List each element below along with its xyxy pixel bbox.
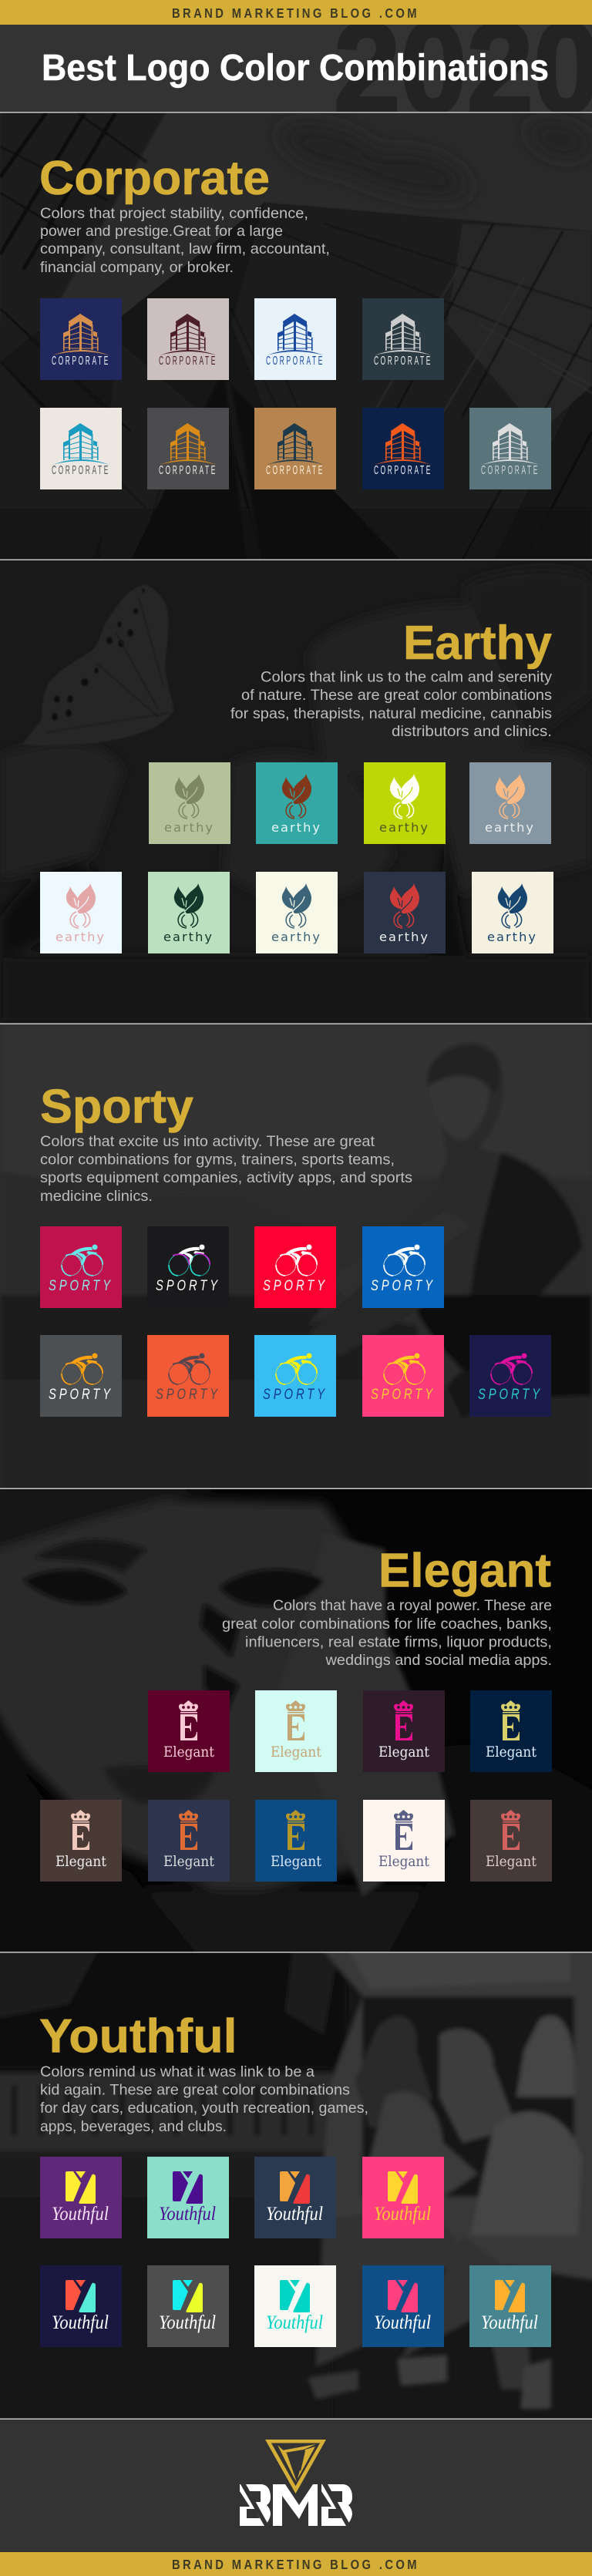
heading: Earthy bbox=[403, 617, 553, 670]
logo: elegant blush bbox=[363, 1800, 445, 1882]
logo: elegant mint bbox=[255, 1690, 337, 1772]
logo: earthy ivory: earthy bbox=[271, 930, 321, 944]
logo: earthy sage: earthy bbox=[164, 820, 214, 835]
logo: corporate slate: CORPORATE bbox=[374, 355, 432, 368]
logo: corporate tan: CORPORATE bbox=[266, 464, 325, 477]
panel: sporty bbox=[0, 1017, 592, 1495]
logo: sporty indigo: SPORTY bbox=[478, 1387, 543, 1403]
description bbox=[222, 1597, 552, 1669]
logo: youthful grey: Youthful bbox=[159, 2312, 216, 2333]
logo: elegant plum bbox=[363, 1690, 445, 1772]
description bbox=[230, 669, 552, 740]
description: influencers, real estate firms, liquor products, bbox=[245, 1634, 552, 1651]
logo: sporty orange: SPORTY bbox=[156, 1387, 220, 1403]
letter M bbox=[273, 2484, 318, 2526]
description: for spas, therapists, natural medicine, cannabis bbox=[230, 705, 552, 722]
logo: elegant plum: Elegant bbox=[378, 1744, 429, 1760]
background photo: butterfly and flowers bbox=[0, 585, 590, 959]
logo: elegant navy bbox=[470, 1690, 552, 1772]
logo: elegant royal blue bbox=[255, 1800, 337, 1882]
logo: youthful aqua bbox=[147, 2157, 229, 2238]
logo: earthy parchment: earthy bbox=[487, 930, 537, 944]
logo: sporty blue bbox=[362, 1226, 444, 1308]
logo: sporty black: SPORTY bbox=[156, 1278, 220, 1294]
logo: sporty indigo bbox=[469, 1335, 551, 1417]
description: color combinations for gyms, trainers, sports teams, bbox=[40, 1152, 395, 1169]
panel: elegant bbox=[0, 1484, 592, 1966]
logo: sporty black bbox=[147, 1226, 229, 1308]
logo: earthy pale blue: earthy bbox=[56, 930, 106, 944]
logo: sporty grey: SPORTY bbox=[49, 1387, 113, 1403]
logo: earthy mint bbox=[148, 872, 230, 953]
logo: earthy blue-grey bbox=[469, 762, 551, 844]
logo: sporty red bbox=[254, 1226, 336, 1308]
logo: elegant burgundy bbox=[148, 1690, 230, 1772]
logo: youthful pink: Youthful bbox=[374, 2204, 431, 2225]
letter B right bbox=[320, 2484, 352, 2526]
logo: sporty crimson bbox=[40, 1226, 122, 1308]
description: power and prestige.Great for a large bbox=[40, 223, 283, 240]
description: distributors and clinics. bbox=[392, 723, 552, 740]
logo: earthy ink: earthy bbox=[379, 930, 429, 944]
logo: elegant taupe: Elegant bbox=[486, 1853, 536, 1870]
description: medicine clinics. bbox=[40, 1188, 153, 1205]
logo: youthful indigo: Youthful bbox=[52, 2312, 109, 2333]
description: Colors that excite us into activity. These are great bbox=[40, 1133, 375, 1150]
logo: corporate steel: CORPORATE bbox=[481, 464, 540, 477]
logo: corporate ice bbox=[254, 298, 336, 380]
logo: corporate navy bbox=[40, 298, 122, 380]
logo: sporty sky: SPORTY bbox=[263, 1387, 328, 1403]
van and people bbox=[308, 1946, 592, 2409]
logo: earthy ivory bbox=[256, 872, 338, 953]
logo: youthful aqua: Youthful bbox=[159, 2204, 216, 2225]
logo: elegant mint: Elegant bbox=[271, 1744, 321, 1760]
icon: butterfly bbox=[22, 584, 173, 745]
background photo: woman on beach bbox=[0, 1017, 592, 1495]
logo: earthy teal: earthy bbox=[271, 820, 321, 835]
logo: elegant navy: Elegant bbox=[486, 1744, 536, 1760]
description: company, consultant, law firm, accountant, bbox=[40, 240, 330, 257]
description: great color combinations for life coaches, banks, bbox=[222, 1616, 552, 1633]
description: kid again. These are great color combinations bbox=[40, 2081, 350, 2098]
logo: earthy lime bbox=[364, 762, 446, 844]
logo: elegant brown: Elegant bbox=[56, 1853, 106, 1870]
heading: Corporate bbox=[39, 152, 270, 205]
letter B left bbox=[238, 2484, 271, 2526]
logo: youthful white bbox=[254, 2265, 336, 2347]
logo: corporate midnight bbox=[362, 408, 444, 489]
description: Colors that project stability, confidence, bbox=[40, 205, 308, 222]
logo: youthful white: Youthful bbox=[266, 2312, 323, 2333]
logo: earthy lime: earthy bbox=[379, 820, 429, 835]
logo: sporty pink: SPORTY bbox=[371, 1387, 436, 1403]
BMB wordmark bbox=[238, 2484, 352, 2526]
heading: Youthful bbox=[39, 2010, 237, 2063]
panel: corporate bbox=[0, 113, 592, 560]
description bbox=[40, 205, 330, 276]
logo: youthful navy: Youthful bbox=[266, 2204, 323, 2225]
background photo: skyscraper bbox=[0, 113, 592, 560]
description: apps, beverages, and clubs. bbox=[40, 2118, 227, 2135]
logo: youthful blue: Youthful bbox=[374, 2312, 431, 2333]
bottom brand band: BRAND MARKETING BLOG .COM bbox=[172, 2557, 419, 2572]
logo: youthful teal: Youthful bbox=[481, 2312, 538, 2333]
logo: youthful teal bbox=[469, 2265, 551, 2347]
logo: earthy teal bbox=[256, 762, 338, 844]
description bbox=[40, 2063, 368, 2135]
logo: elegant taupe bbox=[470, 1800, 552, 1882]
logo: youthful grey bbox=[147, 2265, 229, 2347]
logo: sporty blue: SPORTY bbox=[371, 1278, 436, 1294]
logo: sporty grey bbox=[40, 1335, 122, 1417]
panel: youthful bbox=[0, 1946, 592, 2424]
logo: corporate mauve: CORPORATE bbox=[159, 355, 217, 368]
description: weddings and social media apps. bbox=[325, 1652, 552, 1669]
logo: earthy blue-grey: earthy bbox=[485, 820, 535, 835]
panel: earthy bbox=[0, 585, 590, 959]
logo: corporate slate bbox=[362, 298, 444, 380]
description: Colors remind us what it was link to be a bbox=[40, 2063, 314, 2080]
description: Colors that link us to the calm and serenity bbox=[261, 669, 552, 686]
logo: youthful indigo bbox=[40, 2265, 122, 2347]
logo: earthy sage bbox=[149, 762, 230, 844]
logo: corporate ice: CORPORATE bbox=[266, 355, 325, 368]
logo: corporate mauve bbox=[147, 298, 229, 380]
logo: sporty sky bbox=[254, 1335, 336, 1417]
bottom brand band bbox=[0, 2552, 592, 2576]
description: for day cars, education, youth recreation, games, bbox=[40, 2100, 368, 2117]
logo: youthful purple: Youthful bbox=[52, 2204, 109, 2225]
title: Best Logo Color Combinations bbox=[42, 48, 549, 89]
logo: sporty crimson: SPORTY bbox=[49, 1278, 113, 1294]
logo: corporate tan bbox=[254, 408, 336, 489]
logo: elegant slate bbox=[148, 1800, 230, 1882]
logo: sporty orange bbox=[147, 1335, 229, 1417]
description bbox=[40, 1133, 412, 1205]
logo: elegant slate: Elegant bbox=[163, 1853, 214, 1870]
top brand band: BRAND MARKETING BLOG .COM bbox=[172, 5, 419, 21]
header panel bbox=[0, 25, 592, 112]
logo: elegant brown bbox=[40, 1800, 122, 1882]
logo: corporate grey bbox=[147, 408, 229, 489]
heading: Sporty bbox=[40, 1081, 194, 1133]
logo: elegant blush: Elegant bbox=[378, 1853, 429, 1870]
description: of nature. These are great color combinations bbox=[241, 687, 552, 704]
logo: elegant royal blue: Elegant bbox=[271, 1853, 321, 1870]
background photo: woman's face bbox=[0, 1484, 592, 1966]
top brand band bbox=[0, 0, 592, 25]
logo: corporate grey: CORPORATE bbox=[159, 464, 217, 477]
logo: earthy ink bbox=[364, 872, 446, 953]
description: financial company, or broker. bbox=[40, 259, 234, 276]
logo: earthy parchment bbox=[472, 872, 553, 953]
logo: corporate cream bbox=[40, 408, 122, 489]
icon: BMB triangle logo bbox=[265, 2440, 326, 2494]
background photo: friends in a van bbox=[0, 1946, 592, 2424]
woman silhouette bbox=[308, 1044, 592, 1418]
logo: corporate cream: CORPORATE bbox=[52, 464, 110, 477]
logo: youthful navy bbox=[254, 2157, 336, 2238]
logo: corporate midnight: CORPORATE bbox=[374, 464, 432, 477]
description: Colors that have a royal power. These are bbox=[273, 1597, 552, 1614]
logo: elegant burgundy: Elegant bbox=[163, 1744, 214, 1760]
logo: youthful pink bbox=[362, 2157, 444, 2238]
heading: Elegant bbox=[378, 1545, 551, 1597]
logo: earthy pale blue bbox=[40, 872, 122, 953]
logo: youthful blue bbox=[362, 2265, 444, 2347]
logo: earthy mint: earthy bbox=[163, 930, 214, 944]
logo: corporate steel bbox=[469, 408, 551, 489]
footer panel bbox=[0, 2420, 592, 2552]
logo: youthful purple bbox=[40, 2157, 122, 2238]
logo: sporty red: SPORTY bbox=[263, 1278, 328, 1294]
logo: corporate navy: CORPORATE bbox=[52, 355, 110, 368]
logo: sporty pink bbox=[362, 1335, 444, 1417]
description: sports equipment companies, activity apps, and sports bbox=[40, 1169, 412, 1186]
